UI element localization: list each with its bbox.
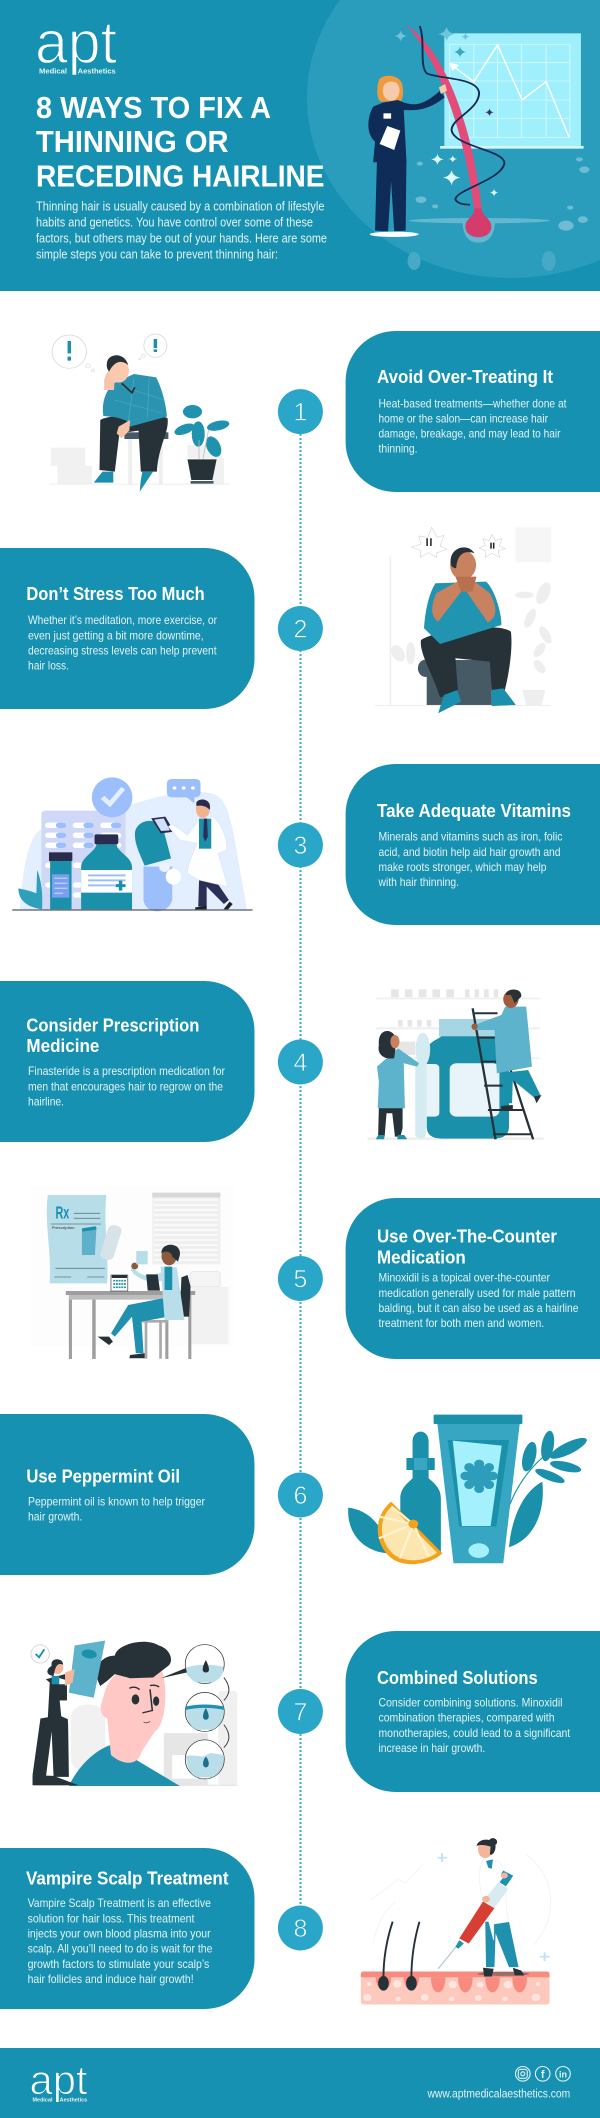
illustration: doctor at desk with prescription: Rx <box>55 1203 70 1222</box>
logo: apt Medical Aesthetics: Aesthetics <box>78 66 116 76</box>
number badge 4: 4 <box>293 1049 307 1077</box>
number badge 8: 8 <box>293 1915 307 1943</box>
number badge 5 <box>278 1256 323 1301</box>
timeline dotted line <box>300 434 302 1906</box>
body text: thinning. <box>378 443 418 456</box>
body text: Vampire Scalp Treatment is an effective <box>28 1897 211 1910</box>
body text: solution for hair loss. This treatment <box>28 1912 195 1925</box>
body text: make roots stronger, which may help <box>378 861 546 874</box>
illustration: doctor injecting scalp with syringe <box>361 1838 551 2004</box>
body text <box>28 1065 225 1108</box>
body text <box>28 1495 205 1523</box>
body text: Minoxidil is a topical over-the-counter <box>378 1272 550 1285</box>
body text: Finasteride is a prescription medication for <box>28 1065 225 1078</box>
body text <box>378 1272 578 1330</box>
body text <box>378 397 567 456</box>
title: RECEDING HAIRLINE <box>36 160 324 194</box>
body text: scalp. All you’ll need to do is wait for the <box>28 1943 212 1956</box>
header banner <box>0 0 600 291</box>
icon: facebook: f <box>541 2069 545 2081</box>
heading: Medicine <box>26 1035 99 1056</box>
social icons <box>516 2066 570 2081</box>
illustration: stressed man sitting with plant <box>50 334 231 492</box>
title <box>36 91 324 194</box>
number badge 1: 1 <box>293 398 307 426</box>
heading <box>377 1225 557 1267</box>
body text: home or the salon—can increase hair <box>378 413 548 426</box>
body text: increase in hair growth. <box>378 1742 485 1755</box>
body text: Minerals and vitamins such as iron, folic <box>378 831 563 844</box>
body text: damage, breakage, and may lead to hair <box>378 428 561 441</box>
number badge 7: 7 <box>293 1698 307 1726</box>
illustration: man with scalp follicle diagrams and doctor <box>31 1641 237 1786</box>
body text: hair loss. <box>28 659 69 672</box>
footer logo: Aesthetics <box>60 2098 87 2104</box>
panel: step 2 <box>0 548 254 709</box>
number badge 3: 3 <box>293 832 307 860</box>
intro text: simple steps you can take to prevent thinning hair: <box>36 248 278 262</box>
heading: Avoid Over-Treating It <box>377 366 553 387</box>
heading: Vampire Scalp Treatment <box>26 1868 228 1889</box>
number badge 1 <box>278 389 323 434</box>
website url: www.aptmedicalaesthetics.com <box>427 2086 570 2100</box>
body text <box>28 614 217 672</box>
body text: treatment for both men and women. <box>378 1317 544 1330</box>
title: 8 WAYS TO FIX A <box>36 91 271 125</box>
footer logo: apt <box>30 2057 88 2103</box>
icon: instagram <box>516 2066 530 2081</box>
icon: linkedin: in <box>559 2069 567 2079</box>
body text <box>28 1897 212 1986</box>
body text: decreasing stress levels can help prevent <box>28 644 217 657</box>
heading: Use Peppermint Oil <box>26 1465 180 1486</box>
body text: Whether it’s meditation, more exercise, or <box>28 614 217 627</box>
logo: apt Medical Aesthetics: Medical <box>39 66 67 76</box>
body text: medication generally used for male pattern <box>378 1287 576 1300</box>
intro text: habits and genetics. You have control over some of these <box>36 216 313 230</box>
title: THINNING OR <box>36 125 228 159</box>
panel: step 8 <box>0 1848 254 2009</box>
body text: hair growth. <box>28 1510 82 1523</box>
intro text: Thinning hair is usually caused by a combination of lifestyle <box>36 200 324 214</box>
heading: Take Adequate Vitamins <box>377 800 571 821</box>
heading: Combined Solutions <box>377 1667 538 1688</box>
body text <box>378 831 563 889</box>
footer bar <box>0 2048 600 2118</box>
number badge 8 <box>278 1906 323 1950</box>
heading: Consider Prescription <box>26 1014 199 1035</box>
number badge 5: 5 <box>293 1266 307 1294</box>
body text: injects your own blood plasma into your <box>28 1928 211 1940</box>
body text: monotherapies, could lead to a significant <box>378 1727 571 1740</box>
body text: balding, but it can also be used as a hairline <box>378 1302 578 1315</box>
illustration: pharmacist with vitamin bottles <box>12 777 253 911</box>
body text: growth factors to stimulate your scalp’s <box>28 1958 209 1971</box>
illustration: giant medicine jar with woman and man on ladder <box>367 989 543 1140</box>
number badge 6: 6 <box>293 1482 307 1510</box>
panel: step 6 <box>0 1414 254 1575</box>
intro text: factors, but others may be out of your hands. Here are some <box>36 232 327 246</box>
body text: Consider combining solutions. Minoxidil <box>378 1696 562 1710</box>
body text: acid, and biotin help aid hair growth and <box>378 846 560 859</box>
body text: hairline. <box>28 1095 64 1108</box>
illustration: doctor presenting a hair strand and chart <box>368 25 589 271</box>
number badge 3 <box>278 822 323 868</box>
panel: step 7 <box>346 1631 600 1792</box>
number badge 7 <box>278 1689 323 1734</box>
body text: even just getting a bit more downtime, <box>28 629 204 642</box>
heading: Use Over-The-Counter <box>377 1225 557 1246</box>
heading: Medication <box>377 1246 466 1267</box>
heading <box>26 1014 199 1056</box>
body text: Heat-based treatments—whether done at <box>378 397 567 410</box>
panel: step 5 <box>346 1198 600 1359</box>
body text <box>378 1696 571 1755</box>
illustration: doctor at desk with prescription: Prescription <box>52 1226 75 1230</box>
panel: step 1 <box>346 331 600 492</box>
number badge 4 <box>278 1040 323 1084</box>
number badge 2 <box>278 606 323 651</box>
footer logo: Medical <box>32 2098 53 2104</box>
illustration: serum bottle, cream tube, orange and leaves <box>348 1415 590 1564</box>
illustration: doctor at desk with prescription <box>31 1187 233 1359</box>
heading: Don’t Stress Too Much <box>26 583 205 604</box>
illustration: worried man sitting with hands on face <box>375 527 554 713</box>
body text: Peppermint oil is known to help trigger <box>28 1495 205 1508</box>
panel: step 3 <box>346 764 600 925</box>
body text: hair follicles and induce hair growth! <box>28 1973 194 1986</box>
body text: combination therapies, compared with <box>378 1712 554 1725</box>
body text: men that encourages hair to regrow on the <box>28 1080 223 1093</box>
body text: with hair thinning. <box>378 876 459 889</box>
panel: step 4 <box>0 981 254 1142</box>
number badge 2: 2 <box>293 616 307 644</box>
number badge 6 <box>278 1472 323 1518</box>
intro text <box>36 200 327 262</box>
logo: apt Medical Aesthetics: apt <box>35 9 117 76</box>
